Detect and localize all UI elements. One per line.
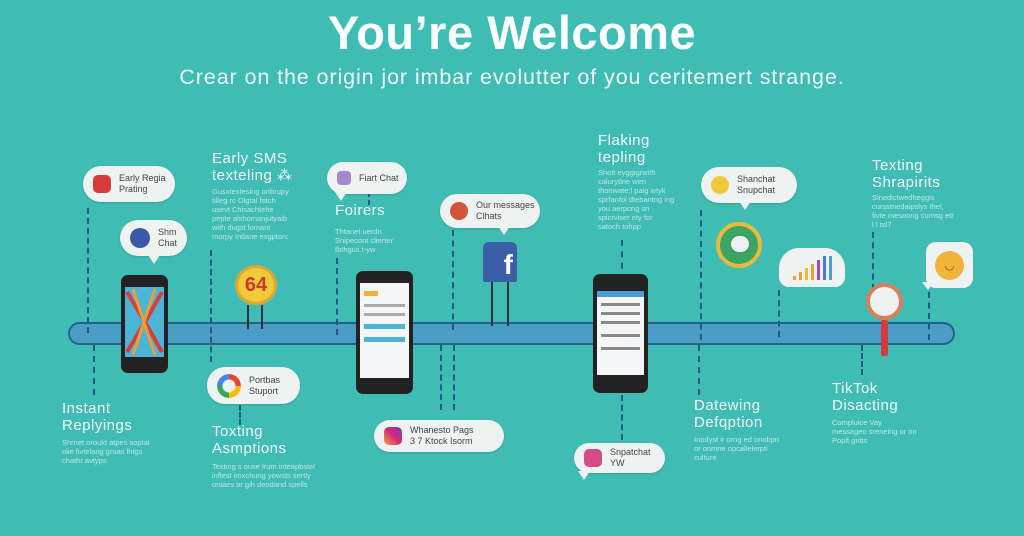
heading: Foirers: Foirers <box>335 202 385 219</box>
bubble: Snpatchat YW <box>574 443 665 473</box>
bubble: Google <box>207 367 300 404</box>
heading: Early SMS texteling: Early SMS <box>212 150 287 167</box>
text: Inodyst ir orng ed onobpn or onmne opcallelerpti culture <box>694 435 779 462</box>
bubble: Whanesto Pags <box>374 420 504 452</box>
heading: Toxting Asmptions: Toxting <box>212 423 263 440</box>
bubble: Early Regia Prating: Prating <box>119 184 148 194</box>
text: Texting s ouse lrum inteapbstel inflest imxchung yowsts sertly oniaes or gih deodand spells <box>212 462 315 489</box>
heading: Texting Shrapirits <box>872 157 940 191</box>
heading: Datewing Defqption <box>694 397 763 431</box>
icon: sun bubble <box>926 242 973 288</box>
heading: TikTok Disacting: TikTok <box>832 380 878 397</box>
phone 2 <box>356 271 413 394</box>
heading: Toxting Asmptions <box>212 423 287 457</box>
text: Thtanet uerdn Snipecont clierter Ibthgus t-yw <box>335 227 393 254</box>
bubble: Shm Chat: Shm <box>158 227 177 237</box>
heading: Early SMS texteling <box>212 150 293 184</box>
text: Sinedictwedheggis cursstnedaipslys thel, fivte mesoong cumsg etr l I tsl7 <box>872 193 954 229</box>
phone 1 <box>121 275 168 373</box>
text: Compluice Vay messageo sreneing or on Poplt gritts <box>832 418 917 445</box>
bubble: Our messages Clhats: Clhats <box>476 211 502 221</box>
heading: Making tepling: tepling <box>598 149 646 166</box>
bubble: Fiart Chat: Fiart Chat <box>359 172 399 182</box>
text: Shrnet oroukt atpes soptal olie fivtelang gruas lhtgs chathr avtyps <box>62 438 150 465</box>
subtitle: Crear on the origin jor imbar evolutter of you ceritemert strange. <box>179 65 845 89</box>
bubble: Whanesto Pags: 3 7 Ktock Isorm <box>410 436 473 446</box>
heading: TikTok Disacting <box>832 380 898 414</box>
phone 3 <box>593 274 648 393</box>
timeline bar <box>68 322 955 345</box>
bubble: Snpatchat YW: Snpatchat <box>610 447 651 457</box>
title: You’re Welcome <box>328 6 696 59</box>
heading: TikTok Disacting: Disacting <box>832 397 898 414</box>
bubble: Early Regia Prating <box>83 166 175 202</box>
bubble: Shanchat Snupchat <box>701 167 797 203</box>
bubble: Shm Chat: Chat <box>158 238 177 248</box>
icon: cloud bars <box>779 248 845 287</box>
text: Gusxtextesing onbrupy tilleg.rc Olgtal fotch usevt Chisachtehe pepte alshomanjutyaib with dugst lomant morpy Intlane esgptorc <box>212 187 289 241</box>
bubble: Shanchat Snupchat: Shanchat <box>737 174 775 184</box>
bubble: Shanchat Snupchat: Snupchat <box>737 185 775 195</box>
heading: Instant Replyings: Instant <box>62 400 111 417</box>
icon: sun bubble: ◡ <box>944 258 955 272</box>
icon: facebook: f <box>504 249 513 280</box>
heading: Instant Replyings: Replyings <box>62 417 132 434</box>
bubble: Early Regia Prating: Early Regia <box>119 173 166 183</box>
bubble: Shm Chat <box>120 220 187 256</box>
heading: Toxting Asmptions: Asmptions <box>212 440 287 457</box>
heading: Texting Shrapirits: Shrapirits <box>872 174 940 191</box>
heading: Making tepling <box>598 132 650 166</box>
bubble: Our messages Clhats: Our messages <box>476 200 535 210</box>
heading: Early SMS texteling: texteling ⁂ <box>212 167 293 184</box>
icon: green chat <box>716 222 762 268</box>
bubble: Snpatchat YW: YW <box>610 458 624 468</box>
bubble: Fiart Chat <box>327 162 407 194</box>
heading: Making tepling: Flaking <box>598 132 650 149</box>
heading: Datewing Defqption: Defqption <box>694 414 763 431</box>
icon: magnifier <box>866 283 903 356</box>
text: Shott eyggigrwith calurytine wen thonwate;l paig wtyk sprfanfol dtebantng ing you aerpcng sn spicrviser ety for satoch tohpp <box>598 168 674 231</box>
bubble: Our messages Clhats <box>440 194 540 228</box>
bubble: Whanesto Pags: Whanesto Pags <box>410 425 474 435</box>
heading: Texting Shrapirits: Texting <box>872 157 923 174</box>
heading: Instant Replyings <box>62 400 132 434</box>
bubble: Google: Portbas <box>249 374 280 384</box>
icon: yellow emblem: 64 <box>245 274 267 296</box>
bubble: Google: Stuport <box>249 386 278 396</box>
heading: Datewing Defqption: Datewing <box>694 397 761 414</box>
